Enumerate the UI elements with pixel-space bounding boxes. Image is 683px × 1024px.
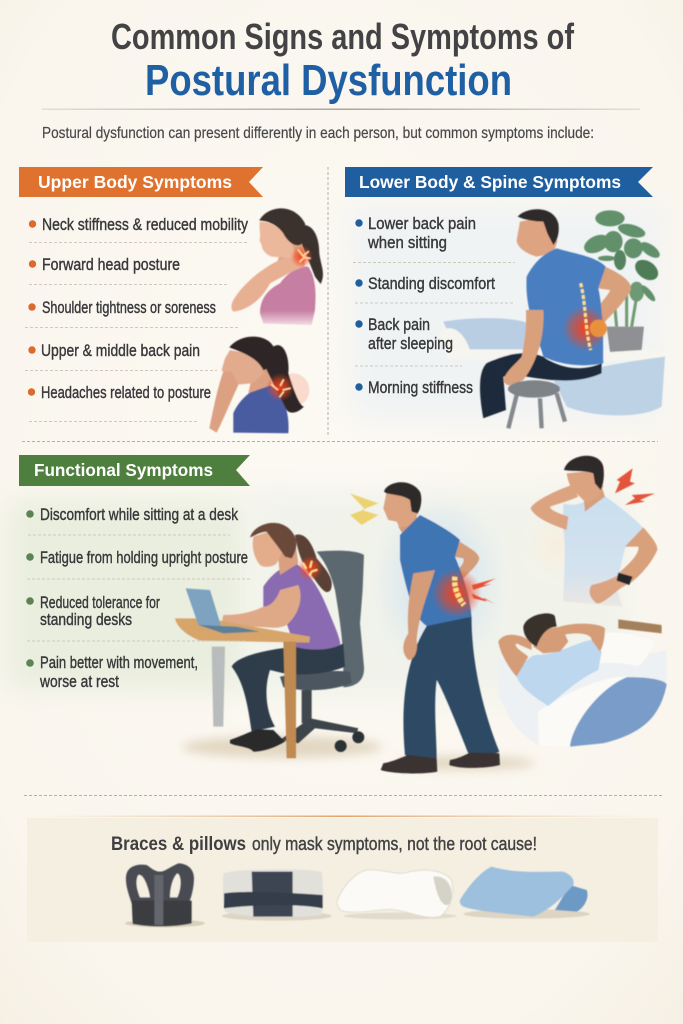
banner: upper body: Upper Body Symptoms bbox=[38, 172, 232, 192]
banner: lower body: Lower Body & Spine Symptoms bbox=[359, 172, 621, 192]
list: lower body symptoms bbox=[353, 214, 515, 397]
icon: posture brace bbox=[125, 863, 205, 927]
list: lower body symptoms: Standing discomfort bbox=[368, 274, 495, 293]
banner: lower body bbox=[345, 167, 653, 197]
list: upper body symptoms: Shoulder tightness or soreness bbox=[42, 298, 216, 317]
list: upper body symptoms: Forward head posture bbox=[42, 255, 180, 274]
banner: functional bbox=[19, 455, 250, 486]
icon: white contoured pillow bbox=[337, 870, 457, 919]
list: functional symptoms: standing desks bbox=[40, 610, 132, 629]
illustration: woman with back pain resting head on hand bbox=[209, 337, 309, 433]
horizontal divider bbox=[24, 794, 662, 796]
illustration: man lying in bed with hands behind head bbox=[498, 613, 667, 747]
list: lower body symptoms: Morning stiffness bbox=[368, 378, 473, 397]
vertical divider bbox=[327, 167, 329, 436]
soft background washes bbox=[8, 205, 660, 700]
list: lower body symptoms: Back pain bbox=[368, 315, 430, 334]
icon: lumbar support pillow with strap bbox=[222, 869, 332, 921]
panel: lower body and spine symptoms bbox=[345, 167, 665, 428]
illustration: man holding neck in pain bbox=[531, 456, 657, 607]
list: functional symptoms: Reduced tolerance for bbox=[40, 593, 160, 612]
illustration: man standing bent with lower back pain bbox=[350, 482, 500, 773]
list: upper body symptoms: Neck stiffness & reduced mobility bbox=[42, 215, 248, 234]
floor shadow bbox=[182, 736, 535, 770]
panel: upper body symptoms bbox=[19, 167, 323, 433]
list: upper body symptoms: Upper & middle back pain bbox=[41, 341, 200, 360]
title bbox=[111, 16, 575, 105]
illustration: woman holding neck and shoulder bbox=[231, 208, 323, 325]
list: upper body symptoms bbox=[25, 215, 248, 422]
title: Postural Dysfunction bbox=[145, 56, 512, 105]
list: functional symptoms bbox=[26, 505, 252, 691]
icon: blue memory foam pillows bbox=[460, 867, 590, 919]
callout background bbox=[27, 818, 658, 942]
list: functional symptoms: Discomfort while sitting at a desk bbox=[40, 505, 238, 524]
list: lower body symptoms: after sleeping bbox=[368, 334, 453, 353]
list: lower body symptoms: when sitting bbox=[367, 233, 447, 252]
banner: functional: Functional Symptoms bbox=[34, 460, 213, 480]
illustration: man sitting on bed with lower back pain beside plant bbox=[440, 209, 665, 428]
list: functional symptoms: worse at rest bbox=[39, 672, 119, 691]
callout text continued: only mask symptoms, not the root cause! bbox=[252, 834, 537, 854]
horizontal divider bbox=[22, 440, 658, 442]
panel: functional symptoms bbox=[19, 455, 667, 773]
list: upper body symptoms: Headaches related to posture bbox=[41, 383, 211, 402]
list: functional symptoms: Pain better with movement, bbox=[40, 653, 198, 672]
panel: braces and pillows callout bbox=[27, 816, 658, 942]
list: functional symptoms: Fatigue from holding upright posture bbox=[40, 548, 248, 567]
intro text: Postural dysfunction can present differently in each person, but common symptoms include: bbox=[42, 125, 594, 142]
title: Common Signs and Symptoms of bbox=[111, 16, 575, 57]
banner: upper body bbox=[19, 167, 263, 197]
illustration: woman hunched at desk with laptop bbox=[175, 523, 364, 758]
list: lower body symptoms: Lower back pain bbox=[368, 214, 476, 233]
callout text: Braces & pillows bbox=[111, 834, 246, 855]
